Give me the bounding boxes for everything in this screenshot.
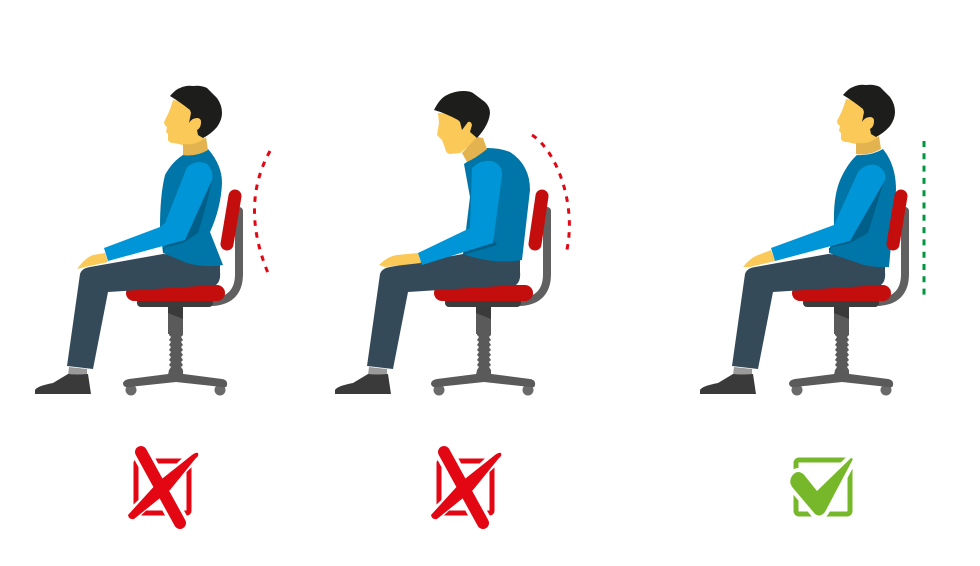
figure: hunched forward, incorrect	[335, 91, 569, 396]
legs 1	[35, 254, 220, 394]
chair 3	[789, 211, 905, 396]
head 2	[434, 91, 490, 162]
dotted arc 1	[254, 151, 270, 273]
arm 3	[771, 165, 885, 261]
chair 2	[431, 211, 547, 396]
icon: green check	[790, 458, 853, 516]
torso 1	[160, 149, 223, 266]
hand 2	[379, 253, 421, 267]
hand 1	[77, 253, 108, 269]
back pad 3	[893, 196, 901, 244]
back pad 1	[227, 196, 235, 244]
torso 3	[829, 149, 896, 267]
hand 3	[743, 250, 775, 267]
head 3	[837, 85, 895, 154]
figure: slouching upright sit, incorrect	[35, 86, 270, 396]
icon: red cross 2	[431, 452, 501, 523]
dotted arc 2	[532, 135, 569, 254]
torso 2	[463, 148, 530, 262]
back pad 2	[535, 196, 542, 244]
legs 3	[700, 254, 885, 394]
dotted line, straight back	[922, 141, 926, 297]
icon: red cross 1	[128, 452, 198, 523]
arm 1	[104, 162, 212, 261]
chair 1	[123, 211, 239, 396]
head 1	[164, 86, 222, 155]
arm 2	[418, 161, 502, 265]
figure: correct upright posture	[700, 85, 924, 396]
legs 2	[335, 254, 520, 394]
